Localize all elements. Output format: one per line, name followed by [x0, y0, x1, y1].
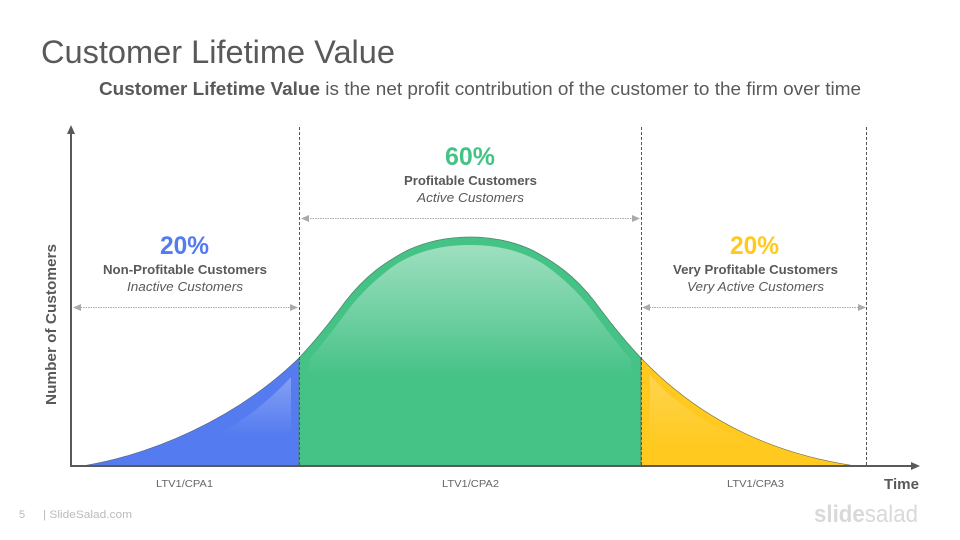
bell curve chart	[82, 237, 856, 466]
callout: non-profitable: 20%	[160, 232, 209, 260]
title: Customer Lifetime Value	[41, 34, 395, 70]
callout: profitable: Profitable Customers	[404, 173, 537, 188]
callout: profitable	[404, 143, 537, 205]
callout: very profitable: Very Active Customers	[687, 279, 825, 294]
callout: non-profitable: Non-Profitable Customers	[103, 262, 267, 277]
axes	[67, 125, 920, 470]
page number: 5	[19, 509, 25, 521]
subtitle: Customer Lifetime Value is the net profit contribution of the customer to the firm over time	[99, 78, 861, 99]
segment: profitable (green)	[299, 237, 641, 466]
x axis label: Time	[884, 476, 919, 493]
ratio label 2: LTV1/CPA2	[442, 478, 499, 490]
dashed dividers	[300, 127, 866, 466]
ratio label 1: LTV1/CPA1	[156, 478, 213, 490]
y axis label: Number of Customers	[44, 244, 60, 405]
range arrow: right	[642, 304, 866, 311]
callout: non-profitable	[103, 232, 267, 294]
callout: very profitable	[673, 232, 838, 294]
range arrow: middle	[301, 215, 640, 222]
logo wordmark: slidesalad	[814, 501, 918, 528]
callout: very profitable: Very Profitable Customers	[673, 262, 838, 277]
footer source: | SlideSalad.com	[43, 509, 132, 521]
callout: profitable: Active Customers	[416, 190, 525, 205]
callout: profitable: 60%	[445, 143, 495, 171]
callout: very profitable: 20%	[730, 232, 779, 260]
segment: very profitable (yellow)	[641, 358, 856, 466]
range arrow: left	[73, 304, 298, 311]
ratio label 3: LTV1/CPA3	[727, 478, 784, 490]
segment: non-profitable (blue)	[82, 358, 299, 466]
callout: non-profitable: Inactive Customers	[127, 279, 244, 294]
